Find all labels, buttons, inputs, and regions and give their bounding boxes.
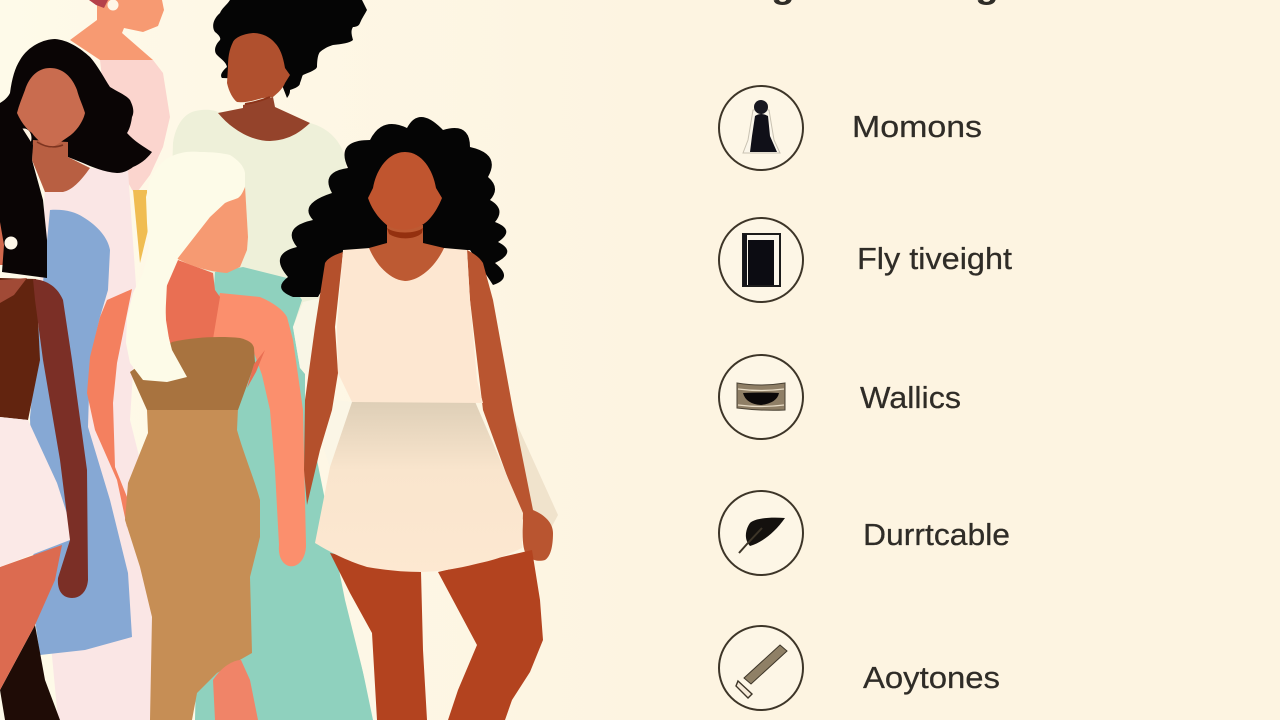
label: Momons [852,109,982,144]
figure: front woman in cream dress [280,117,558,720]
blue panel [30,210,132,655]
white dress [30,168,152,720]
long black hair [0,105,47,278]
back of skirt [515,420,558,530]
illustration: group of women [0,0,558,720]
figure: woman at left edge with brown top [0,105,88,720]
afro hair [213,0,367,98]
leg [213,660,258,720]
right arm and shoulder [205,293,306,566]
face [17,68,85,148]
dark arm [33,279,88,598]
label: Fly tiveight [857,241,1012,276]
figure: woman in mint top with afro hair [170,0,375,720]
white skirt [0,417,70,567]
flesh sliver behind bodice [247,350,265,388]
figure: woman in white dress with blue panel [0,39,152,720]
background gap beside leg [346,590,378,720]
cream gap beside arm [293,298,320,376]
icon: tool in circle [719,626,803,710]
neck [218,97,310,141]
face [227,33,290,102]
label: Durrtcable [863,517,1010,552]
figure: woman in tan dress with blonde hair [87,152,306,720]
icon: band in circle [719,355,803,439]
skirt of dress [125,408,260,720]
curly black hair [280,117,507,297]
yellow strip [133,190,148,263]
arm skin [0,215,15,265]
face [176,186,248,273]
brown top [0,278,40,420]
list item: Aoytones [719,626,1000,710]
flowing hair [0,39,152,173]
list item: Fly tiveight [719,218,1012,302]
skirt [315,397,523,572]
list item: Momons [719,86,982,170]
teal dress [195,267,375,720]
label: Aoytones [863,660,1000,695]
icon: figure in circle [719,86,803,170]
tank top [337,248,483,403]
right arm [467,250,553,561]
neck [165,260,220,345]
icon: feather in circle [719,491,803,575]
neck and chest [32,140,90,192]
upper shoulder skin [0,278,27,303]
black leg [0,625,60,720]
bodice [130,337,255,410]
face [368,152,442,230]
legs [330,553,427,720]
cream gap beside skirt [322,400,352,467]
blonde hair [126,152,245,382]
list item: Wallics [719,355,961,439]
red leg [0,545,62,690]
figure: woman in pink top, back left [70,0,170,195]
label: Wallics [860,380,961,415]
mint shirt [170,110,346,375]
left arm [304,252,343,505]
left arm [87,289,132,527]
icon: door rectangle in circle [719,218,803,302]
chest and neck [369,225,444,281]
list item: Durrtcable [719,491,1010,575]
